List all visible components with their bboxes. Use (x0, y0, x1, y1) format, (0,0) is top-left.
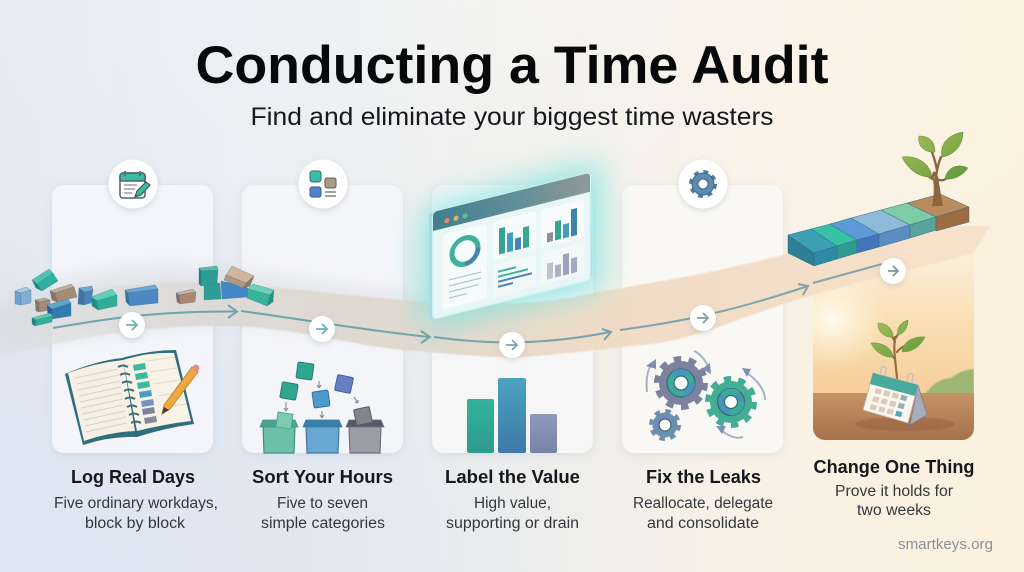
panel: step 3 label the value (432, 185, 593, 532)
description (261, 495, 385, 532)
card 3 (432, 185, 593, 453)
illustration: calendar with sprout (863, 320, 927, 425)
ribbon soft halo (0, 266, 500, 350)
footer brand: smartkeys.org (898, 536, 993, 553)
description: supporting or drain (446, 515, 579, 532)
arrow button 2 (309, 316, 335, 342)
description: block by block (85, 515, 185, 532)
description (446, 495, 579, 532)
arrow button 3 (499, 332, 525, 358)
panel: step 5 change one thing (813, 260, 974, 515)
description: Five to seven (277, 495, 368, 512)
heading: Log Real Days (71, 466, 195, 487)
bar chart (467, 378, 557, 453)
card 2 (242, 185, 403, 453)
description (633, 495, 773, 532)
arrow button 4 (690, 305, 716, 331)
panel: step 1 log real days (52, 160, 218, 532)
description: High value, (474, 495, 551, 512)
title: Conducting a Time Audit (196, 36, 828, 95)
icon: category squares (298, 160, 348, 208)
card 4 (622, 185, 783, 453)
beam segments (788, 194, 969, 266)
illustration: open spiral notebook (65, 350, 199, 445)
block cluster left (15, 269, 158, 326)
description (54, 495, 218, 532)
illustration: sorting bins (260, 362, 384, 453)
heading: Label the Value (445, 466, 580, 487)
heading: Change One Thing (814, 456, 974, 477)
subtitle: Find and eliminate your biggest time wasters (250, 103, 774, 131)
tree (902, 132, 968, 206)
heading: Sort Your Hours (252, 466, 393, 487)
illustration: analytics dashboard (429, 173, 592, 319)
card 5 sunrise scene (813, 260, 974, 440)
description: simple categories (261, 515, 385, 532)
description: Prove it holds for (835, 483, 953, 500)
arrow button 5 (880, 258, 906, 284)
panel: step 2 sort your hours (242, 160, 403, 532)
description: two weeks (857, 502, 931, 519)
step arrow buttons (119, 258, 906, 358)
description (835, 483, 953, 519)
block cluster right (176, 266, 274, 306)
scattered blocks (15, 266, 274, 326)
glow behind dashboard (422, 160, 602, 330)
block beam with tree (788, 132, 969, 266)
description: Reallocate, delegate (633, 495, 773, 512)
description: and consolidate (647, 515, 759, 532)
arrow path segments (53, 264, 882, 343)
icon: gear (678, 160, 728, 208)
icon: calendar with pencil (108, 160, 158, 208)
panel: step 4 fix the leaks (622, 160, 783, 532)
arrow button 1 (119, 312, 145, 338)
heading: Fix the Leaks (646, 466, 761, 487)
card 1 (52, 185, 213, 453)
description: Five ordinary workdays, (54, 495, 218, 512)
illustration: interlocking gears with arrows (646, 351, 765, 438)
ribbon: winding path (0, 226, 990, 357)
